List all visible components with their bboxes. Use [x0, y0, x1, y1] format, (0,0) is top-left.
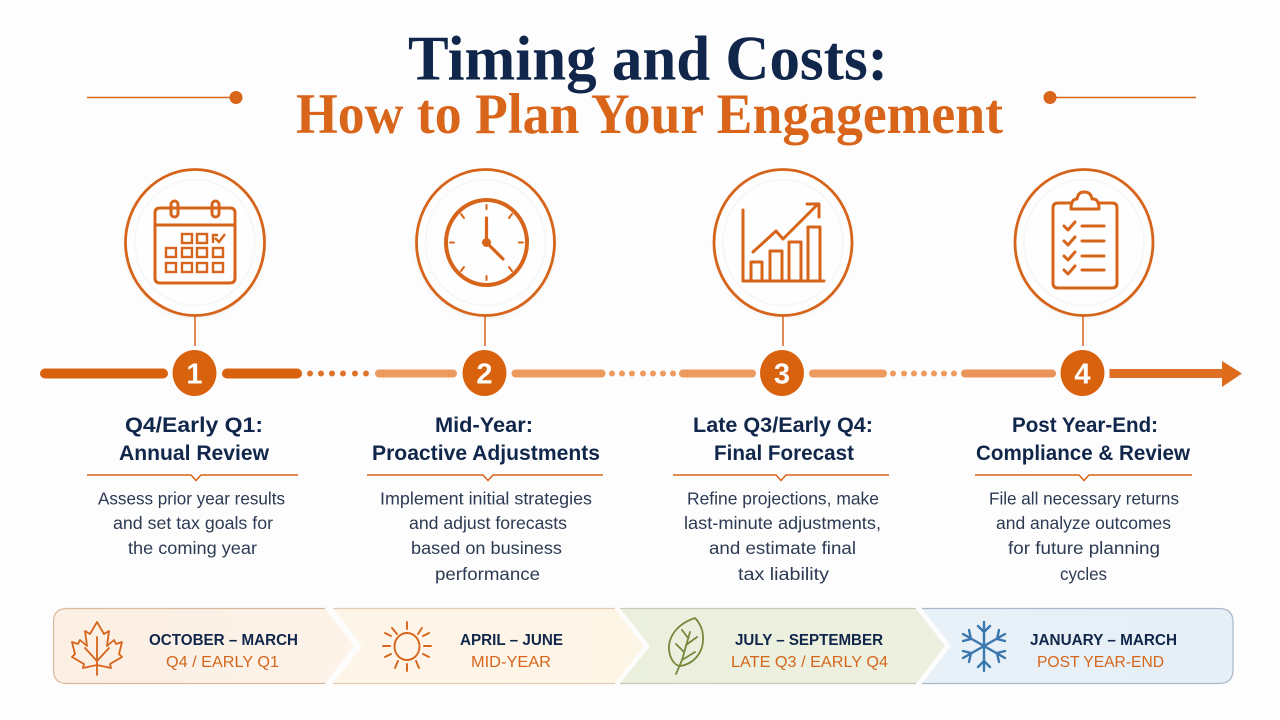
- step 1 text: and set tax goals for: [113, 513, 273, 533]
- step 3 text: and estimate final: [709, 538, 856, 558]
- step 4 text: File all necessary returns: [989, 488, 1179, 508]
- step 4 text: Compliance & Review: [976, 441, 1190, 465]
- season band: winter: JANUARY – MARCH: [1030, 632, 1177, 649]
- season band: summer: LATE Q3 / EARLY Q4: [731, 654, 888, 671]
- step number 1: [172, 350, 216, 396]
- season band: spring: APRIL – JUNE: [460, 632, 563, 649]
- icon: calendar badge: [126, 170, 264, 317]
- step 2 text: Implement initial strategies: [380, 488, 592, 508]
- step 3 text: last-minute adjustments,: [684, 513, 881, 533]
- icon stems: [195, 316, 1083, 346]
- step 4 text: Post Year-End:: [1012, 413, 1158, 437]
- title: [296, 24, 1003, 146]
- title: Timing and Costs:: [408, 24, 888, 94]
- step 2 text: and adjust forecasts: [409, 513, 567, 533]
- step 3 text: Final Forecast: [714, 441, 854, 465]
- step 4 text: and analyze outcomes: [996, 513, 1171, 533]
- timeline: [40, 361, 1242, 387]
- step 4 text: cycles: [1060, 564, 1107, 584]
- step number 2: 2: [476, 358, 493, 390]
- step 2 text: Proactive Adjustments: [372, 441, 600, 465]
- step number 1: 1: [186, 358, 203, 390]
- icon: sun: [383, 622, 431, 671]
- step 3 text: tax liability: [738, 564, 829, 584]
- step number 4: 4: [1074, 358, 1091, 390]
- icon: green leaf: [669, 618, 703, 674]
- season band: autumn: [54, 608, 354, 684]
- step 1 text: Assess prior year results: [98, 488, 285, 508]
- icon: clock badge: [416, 170, 554, 317]
- title: How to Plan Your Engagement: [296, 83, 1003, 146]
- season band: autumn: OCTOBER – MARCH: [149, 632, 298, 649]
- step 2 text: [367, 413, 603, 584]
- step 2 text: performance: [435, 564, 540, 584]
- icon: maple leaf: [72, 622, 122, 675]
- step number 2: [462, 350, 506, 396]
- step 1 text: [87, 413, 298, 558]
- step 3 text: Late Q3/Early Q4:: [693, 413, 873, 437]
- step 3 text: [673, 413, 889, 584]
- step number 4: [1060, 350, 1104, 396]
- season band: winter: [922, 608, 1233, 684]
- season band: autumn: Q4 / EARLY Q1: [166, 654, 279, 671]
- title ornament: left: [87, 91, 242, 104]
- step 3 text: Refine projections, make: [687, 488, 879, 508]
- title ornament: right: [1044, 91, 1196, 104]
- step 1 text: Annual Review: [119, 441, 269, 465]
- step 4 text: [975, 413, 1192, 584]
- step 4 text: for future planning: [1008, 538, 1160, 558]
- icon: snowflake: [963, 622, 1005, 671]
- step 2 text: based on business: [411, 538, 562, 558]
- icon: growth chart badge: [714, 170, 852, 317]
- season band: summer: [620, 608, 945, 684]
- season band: spring: MID-YEAR: [471, 654, 551, 671]
- icon: clipboard badge: [1015, 170, 1153, 317]
- step number 3: 3: [774, 358, 790, 390]
- season band: winter: POST YEAR-END: [1037, 654, 1164, 671]
- step 1 text: the coming year: [128, 538, 257, 558]
- season band: spring: [333, 608, 644, 684]
- season band: summer: JULY – SEPTEMBER: [735, 632, 883, 649]
- step 2 text: Mid-Year:: [435, 413, 533, 437]
- step 1 text: Q4/Early Q1:: [125, 413, 263, 437]
- step number 3: [760, 350, 804, 396]
